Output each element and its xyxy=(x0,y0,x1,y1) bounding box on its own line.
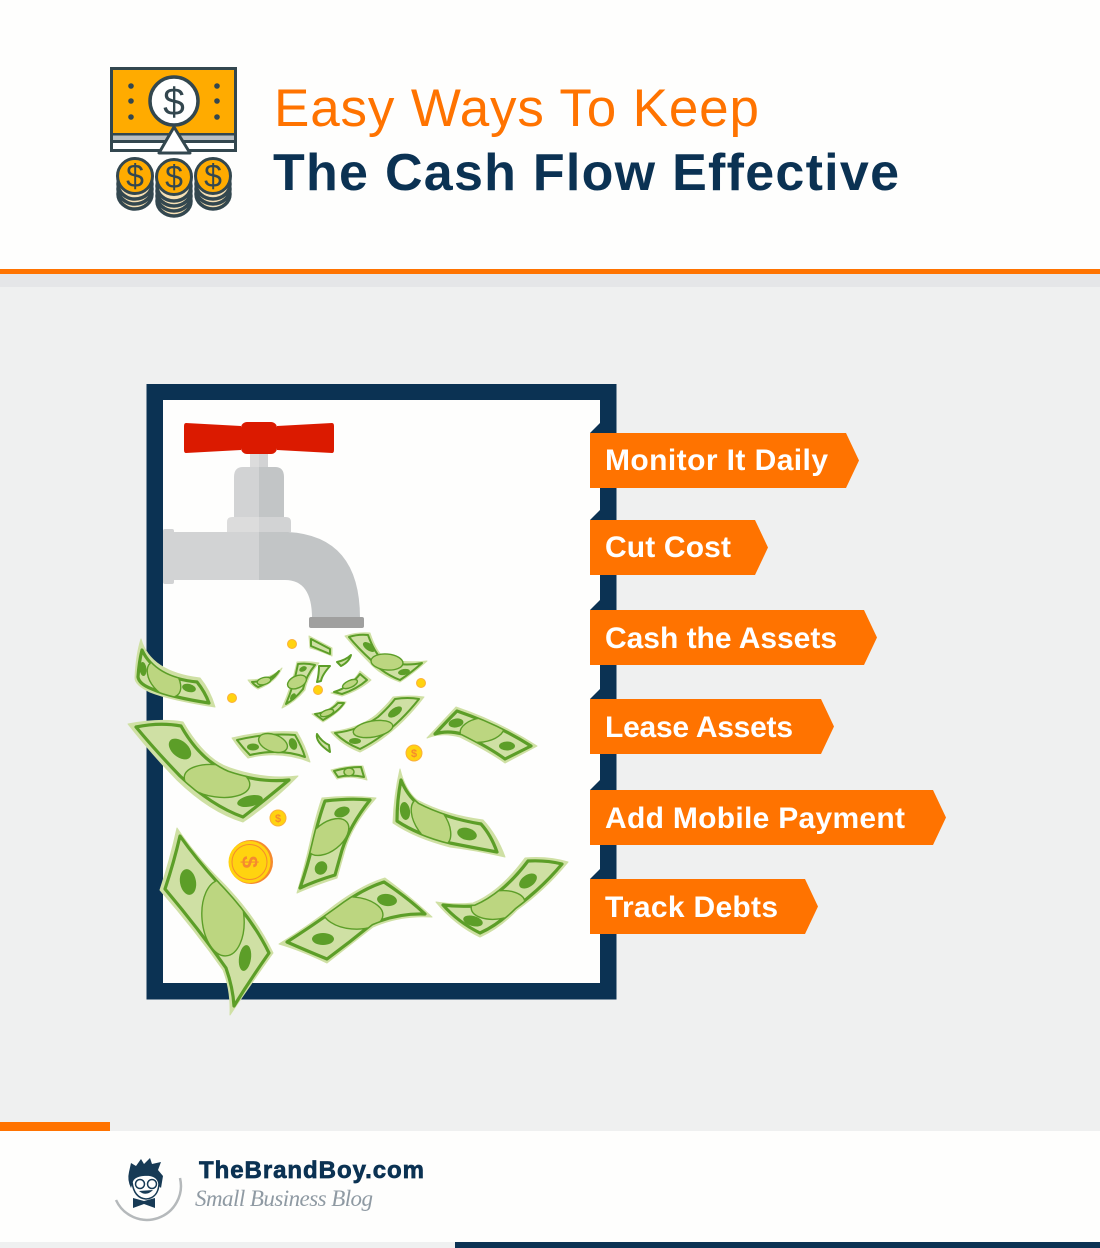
bill: top left xyxy=(135,639,215,707)
logo text: TheBrandBoy.com xyxy=(199,1157,424,1184)
bill: top right xyxy=(345,633,427,682)
bill: bottom left large xyxy=(160,828,273,1015)
bill: centre right xyxy=(331,696,424,752)
bill: small centre xyxy=(312,701,346,722)
bill: lower centre xyxy=(297,796,376,893)
tag: Lease Assets: Lease Assets xyxy=(605,711,793,744)
title xyxy=(273,79,899,202)
tag: Lease Assets xyxy=(590,689,834,754)
bill: bottom centre xyxy=(279,878,432,963)
logo text xyxy=(195,1157,424,1211)
icon: money and coins xyxy=(111,68,236,216)
tag: Monitor It Daily: Monitor It Daily xyxy=(605,444,828,477)
coins: $ xyxy=(411,748,417,760)
logo: brand boy avatar xyxy=(116,1158,181,1220)
bill: low centre xyxy=(331,766,367,780)
bill: small upper xyxy=(248,668,282,689)
tag: Cut Cost xyxy=(590,510,768,575)
panel: picture frame xyxy=(146,384,616,1000)
tag: Cut Cost: Cut Cost xyxy=(605,531,731,564)
coins: $ xyxy=(275,813,281,825)
tag: Cash the Assets xyxy=(590,600,877,665)
tag: Add Mobile Payment xyxy=(590,780,946,845)
money bills and coins xyxy=(128,633,568,1015)
icon: water tap xyxy=(163,422,364,628)
tag: Monitor It Daily xyxy=(590,423,859,488)
footer band xyxy=(0,1122,1100,1248)
bill: tiny top xyxy=(337,655,351,666)
icon: money and coins: $ xyxy=(165,159,183,195)
tag: Cash the Assets: Cash the Assets xyxy=(605,622,837,655)
bill: narrow upper xyxy=(282,662,319,708)
bill: small top xyxy=(309,636,332,656)
title: The Cash Flow Effective xyxy=(273,144,899,202)
tag: Add Mobile Payment: Add Mobile Payment xyxy=(605,802,905,835)
bill: tiny xyxy=(317,666,330,682)
header band xyxy=(0,0,1100,287)
bill: sliver xyxy=(317,734,330,752)
coins xyxy=(228,640,426,884)
title: Easy Ways To Keep xyxy=(274,79,759,138)
bill: bottom right xyxy=(436,858,568,937)
bill: large left xyxy=(128,720,298,822)
icon: money and coins: $ xyxy=(126,158,144,194)
logo text: Small Business Blog xyxy=(195,1186,373,1211)
bill: middle xyxy=(232,730,310,762)
bill: lower right curl xyxy=(393,769,505,857)
icon: money and coins: $ xyxy=(163,81,185,124)
bill: small right of centre xyxy=(331,671,371,696)
icon: money and coins: $ xyxy=(204,158,222,194)
tag: Track Debts: Track Debts xyxy=(605,891,778,924)
tag: Track Debts xyxy=(590,869,818,934)
bill: right xyxy=(427,707,537,763)
coins: $ xyxy=(237,856,262,868)
